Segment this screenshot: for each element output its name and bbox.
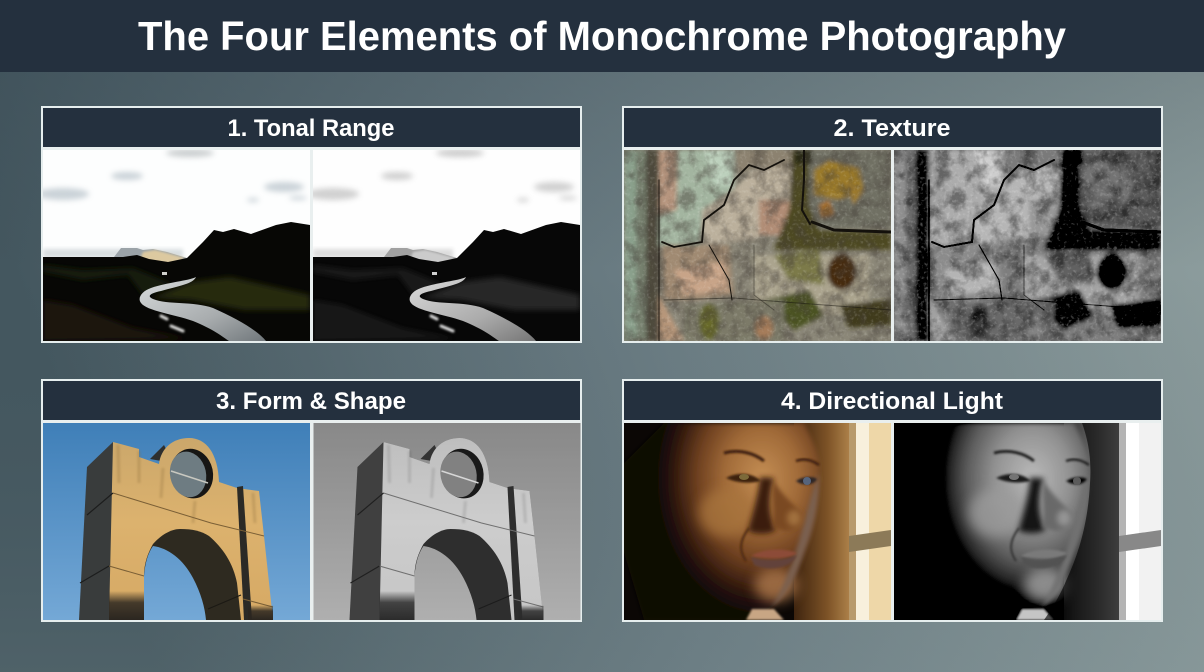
heading: texture (624, 108, 1161, 147)
photo: monochrome portrait (894, 423, 1161, 620)
photo: colour arch (43, 423, 310, 620)
heading: form and shape: 3. Form & Shape (216, 388, 406, 415)
heading: directional light: 4. Directional Light (781, 388, 1003, 415)
panel: directional light (623, 380, 1162, 621)
title: The Four Elements of Monochrome Photography (138, 13, 1066, 59)
title band (0, 0, 1204, 72)
heading: texture: 2. Texture (834, 115, 950, 142)
heading: directional light (624, 381, 1161, 420)
photo: colour portrait (624, 423, 891, 620)
photo: monochrome arch (314, 423, 580, 620)
photo: colour landscape (43, 150, 310, 341)
photo: monochrome landscape (313, 150, 580, 341)
heading: form and shape (43, 381, 580, 420)
panel: tonal range (37, 107, 581, 342)
heading: tonal range (43, 108, 580, 147)
panel: texture (623, 107, 1162, 342)
photo: colour wall (624, 150, 891, 341)
photo: monochrome wall (894, 150, 1161, 341)
heading: tonal range: 1. Tonal Range (228, 115, 394, 142)
panel: form and shape (42, 380, 581, 621)
